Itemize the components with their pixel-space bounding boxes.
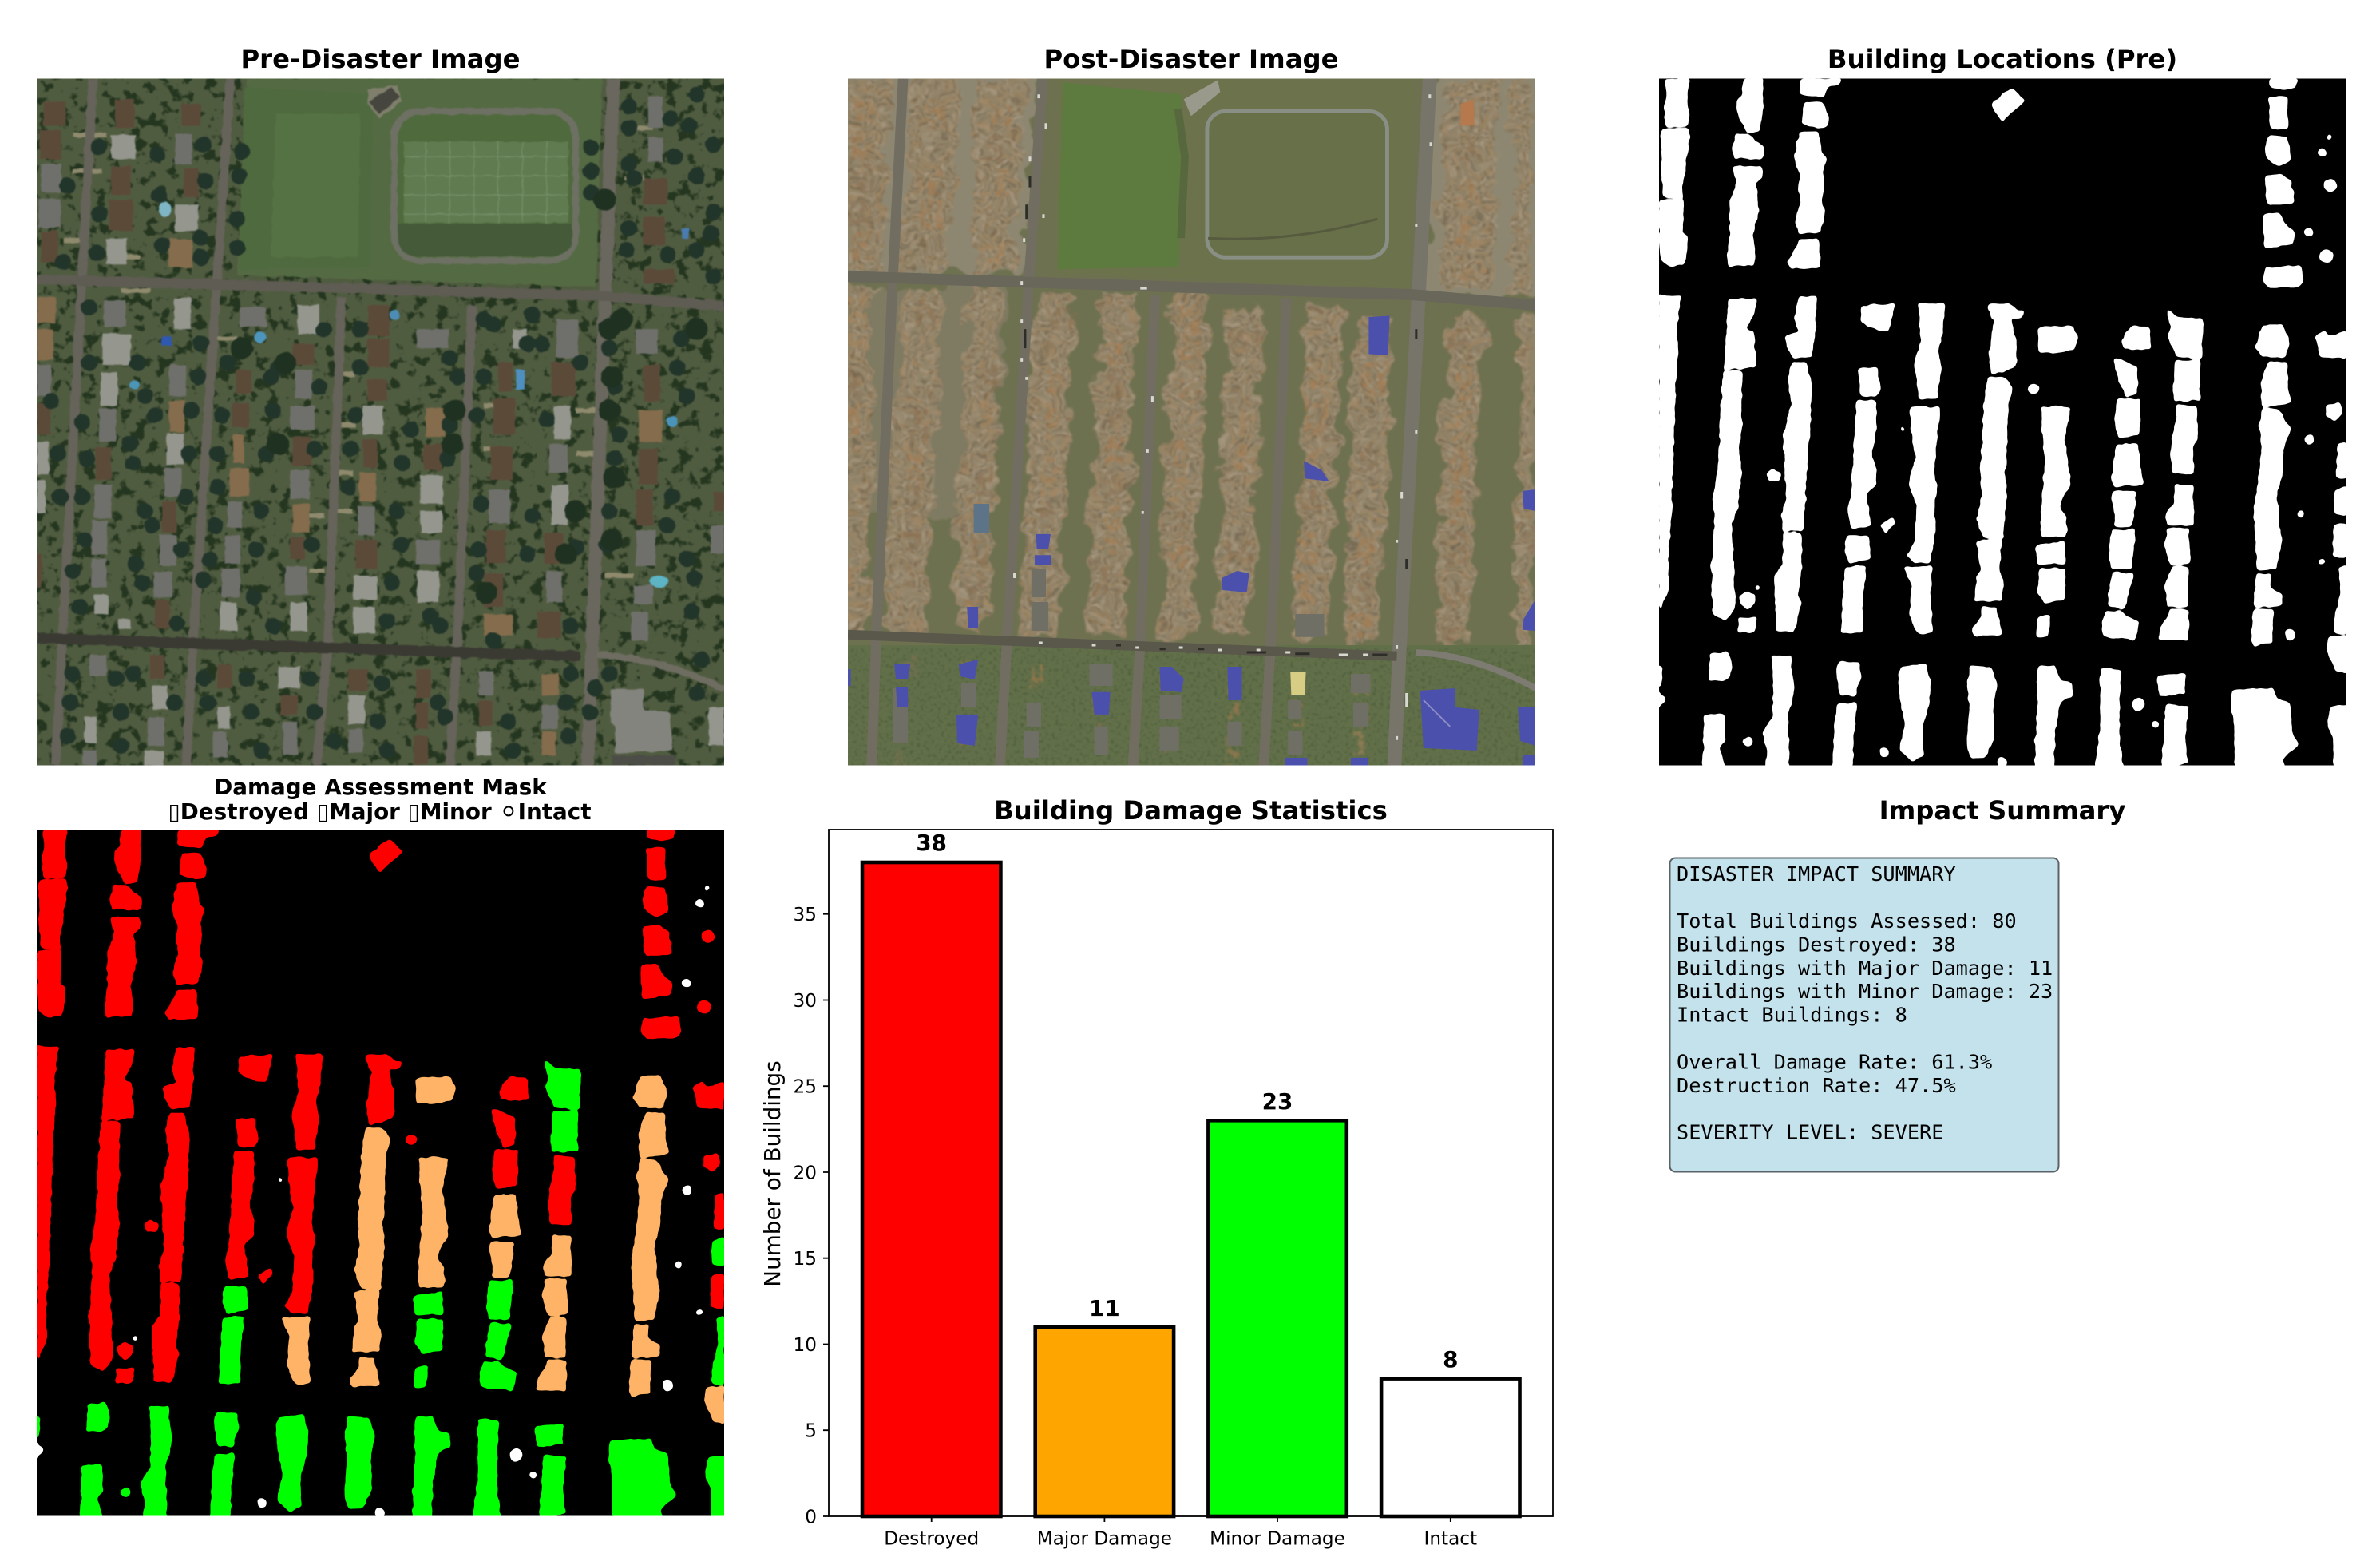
y axis ticks and labels: 20	[794, 1163, 817, 1183]
y axis ticks and labels: 0	[805, 1508, 817, 1528]
y axis ticks and labels: 30	[794, 991, 817, 1012]
value labels: 38	[916, 830, 947, 856]
panel: damage assessment mask	[34, 774, 728, 1520]
y axis ticks and labels: 5	[805, 1421, 817, 1442]
y axis ticks and labels	[794, 905, 829, 1528]
panel: impact summary	[0, 0, 2125, 1172]
colored mask: damage by building	[37, 830, 724, 1515]
x axis ticks and labels	[884, 1516, 1477, 1549]
bar: destroyed 38	[862, 862, 1000, 1516]
summary text: SEVERITY LEVEL: SEVERE	[1677, 1121, 1943, 1144]
chart axes frame	[829, 830, 1553, 1516]
y axis ticks and labels: 25	[794, 1077, 817, 1098]
heading: damage assessment mask with legend: Damage Assessment Mask	[214, 774, 548, 800]
summary text: Intact Buildings: 8	[1677, 1004, 1907, 1027]
summary text: Overall Damage Rate: 61.3%	[1677, 1050, 1992, 1073]
value labels: 11	[1089, 1295, 1120, 1321]
y axis title: Number of Buildings	[759, 1060, 786, 1287]
y axis ticks and labels: 10	[794, 1335, 817, 1356]
y axis ticks and labels: 15	[794, 1249, 817, 1270]
bar: minor damage 23	[1208, 1120, 1347, 1516]
x axis ticks and labels: Major Damage	[1037, 1528, 1172, 1549]
summary text: Total Buildings Assessed: 80	[1677, 909, 2017, 933]
bar: intact 8	[1381, 1379, 1520, 1516]
satellite image: pre-disaster	[37, 78, 724, 765]
summary text box	[1670, 858, 2058, 1172]
summary text: Buildings with Major Damage: 11	[1677, 957, 2053, 980]
value labels: 23	[1262, 1088, 1293, 1115]
binary mask: building footprints	[1659, 78, 2346, 765]
value labels	[916, 830, 1458, 1373]
heading: building damage statistics: Building Damage Statistics	[994, 795, 1388, 826]
bar: major damage 11	[1036, 1327, 1174, 1516]
panel: building locations mask	[1656, 44, 2350, 770]
x axis ticks and labels: Destroyed	[884, 1528, 979, 1549]
heading: damage assessment mask with legend: ▯Destroyed ▯Major ▯Minor ⚪Intact	[168, 798, 592, 825]
panel: pre-disaster image	[29, 44, 735, 775]
heading: pre-disaster image: Pre-Disaster Image	[240, 44, 521, 74]
value labels: 8	[1443, 1346, 1458, 1373]
heading: building locations: Building Locations (Pre)	[1828, 44, 2177, 74]
summary text: DISASTER IMPACT SUMMARY	[1677, 862, 1956, 886]
summary text: Buildings Destroyed: 38	[1677, 933, 1956, 956]
summary text: Buildings with Minor Damage: 23	[1677, 980, 2053, 1003]
x axis ticks and labels: Intact	[1424, 1528, 1477, 1549]
x axis ticks and labels: Minor Damage	[1210, 1528, 1345, 1549]
panel: post-disaster image	[835, 44, 1552, 765]
y axis ticks and labels: 35	[794, 905, 817, 925]
summary text: Destruction Rate: 47.5%	[1677, 1074, 1956, 1097]
panel: building damage statistics chart	[759, 795, 1553, 1549]
satellite image: post-disaster	[848, 78, 1535, 765]
heading: post-disaster image: Post-Disaster Image	[1043, 44, 1339, 74]
heading: impact summary: Impact Summary	[1879, 795, 2125, 826]
